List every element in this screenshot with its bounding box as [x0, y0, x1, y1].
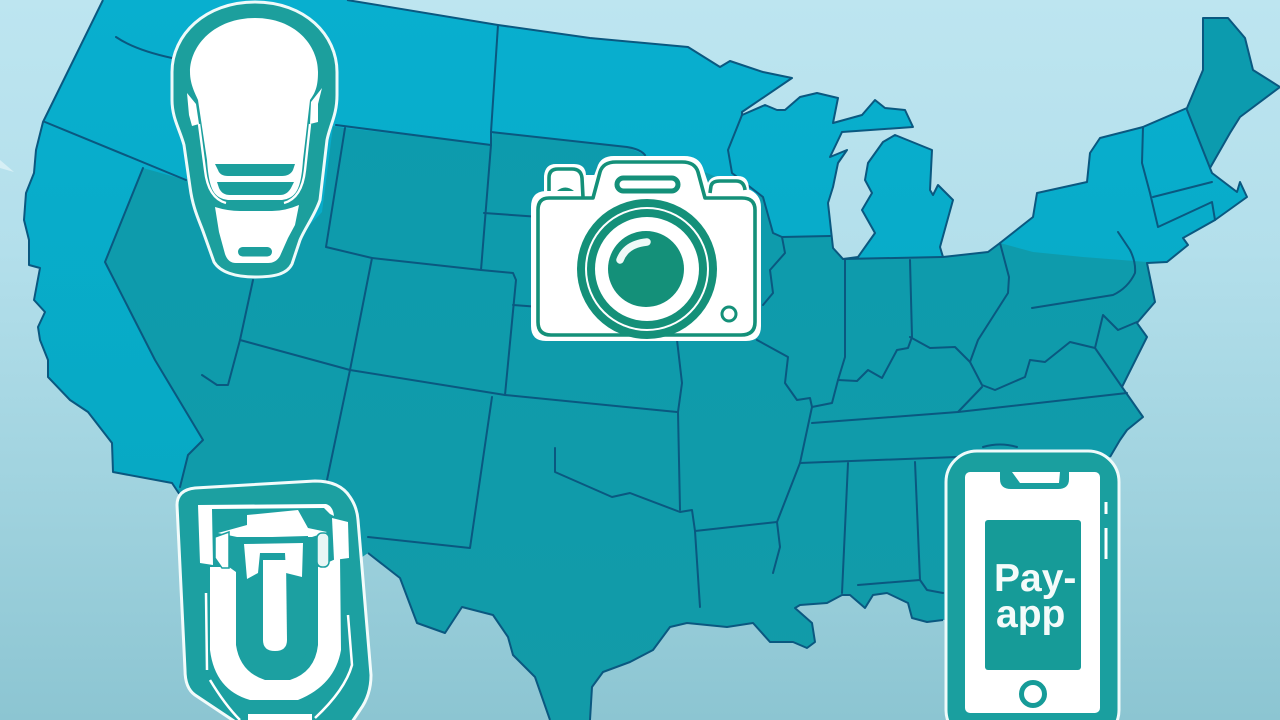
clip right piece	[332, 518, 349, 560]
icon: camera	[532, 157, 760, 340]
camera button	[722, 307, 736, 321]
bulb side highlights	[187, 88, 322, 126]
side buttons	[1104, 502, 1108, 559]
spark mark at left edge	[0, 160, 14, 172]
clip hat	[244, 543, 303, 579]
phone display	[965, 472, 1100, 713]
phone body	[946, 451, 1119, 720]
shield lower accents	[206, 593, 352, 720]
bulb bands	[215, 164, 295, 176]
clip tongue	[263, 560, 287, 651]
map base fill	[106, 126, 1154, 720]
state border lines	[45, 25, 1215, 607]
home button	[1022, 682, 1044, 706]
second bulb band	[217, 182, 294, 195]
inner teal well	[237, 536, 310, 671]
bulb outer casing	[172, 2, 337, 277]
left tab	[215, 532, 229, 568]
bulb inner contour	[199, 124, 310, 203]
lens highlight	[620, 242, 647, 260]
shield body	[177, 481, 371, 720]
shield base plate	[248, 714, 312, 720]
camera body contour	[538, 162, 755, 335]
lens rings	[577, 199, 717, 339]
dial detail	[557, 188, 574, 191]
white U body	[210, 557, 341, 700]
screen label: Pay-	[994, 557, 1076, 600]
base slot	[238, 247, 272, 256]
camera body outline	[532, 157, 760, 340]
Maine	[1188, 19, 1278, 166]
screen label: app	[996, 593, 1065, 636]
northern and coastal states highlight	[0, 0, 1280, 500]
bulb base	[215, 205, 299, 263]
bulb glass	[190, 18, 318, 200]
clip frame left bar and top line	[198, 504, 334, 565]
icon: light bulb	[172, 2, 337, 277]
icon: smartphone with Pay-app screen	[946, 451, 1119, 720]
pay app screen panel	[985, 520, 1081, 670]
phone notch	[1000, 472, 1069, 489]
viewfinder window	[617, 178, 678, 191]
notch cut-out	[1012, 472, 1060, 483]
clip top centre blob	[218, 510, 327, 537]
screen label	[994, 557, 1076, 636]
icon: shield with U clip	[177, 481, 371, 720]
right tab	[317, 533, 329, 567]
